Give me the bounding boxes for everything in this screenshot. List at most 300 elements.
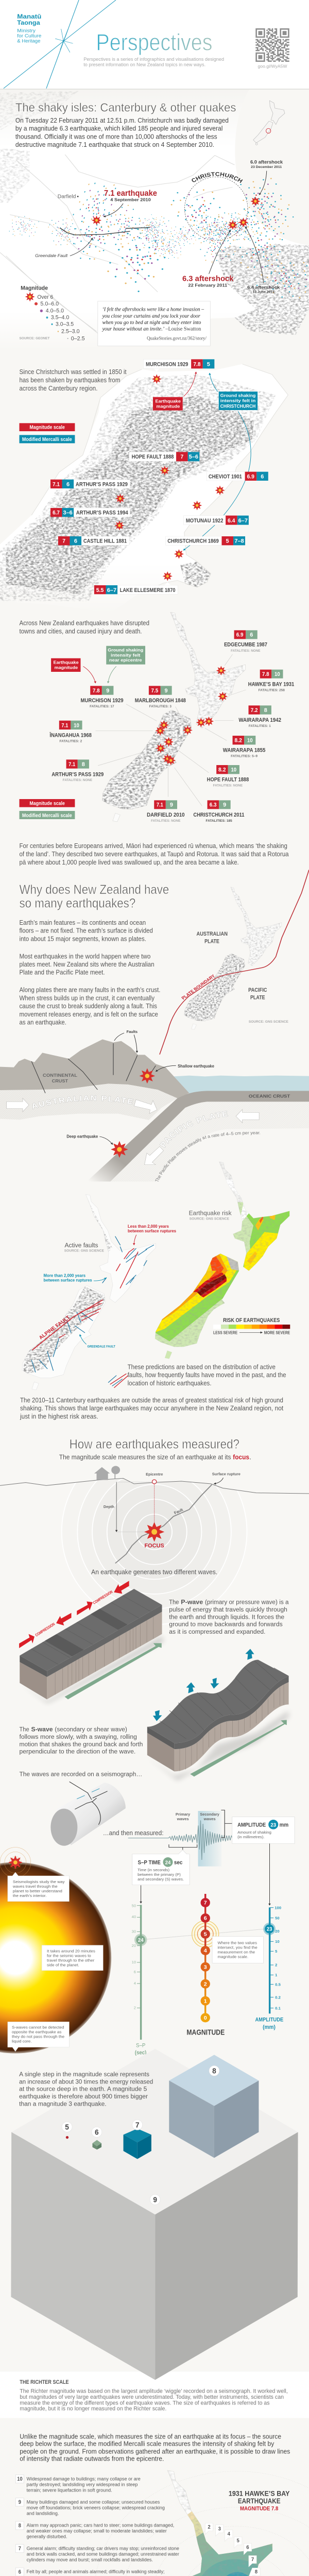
South Island relief map	[0, 364, 288, 613]
dotted intensity rings	[95, 2471, 309, 2576]
quake: Edgecumbe 1987: FATALITIES: NONE	[231, 649, 261, 653]
label: Hope Fault 1888: 7	[181, 453, 183, 460]
chart: amplitude scale: 20	[275, 1929, 280, 1934]
label: Hope Fault 1888: HOPE FAULT 1888	[132, 453, 174, 460]
label: Castle Hill 1881	[58, 533, 129, 545]
quake: Marlborough 1848: MARLBOROUGH 1848	[135, 698, 186, 704]
label: fault: Fault	[173, 1507, 184, 1515]
label: Lake Ellesmere 1870	[94, 582, 178, 594]
heading: how are earthquakes measured: How are earthquakes measured?	[70, 1436, 239, 1451]
header QR code: goo.gl/WyA5W	[258, 64, 287, 69]
intensity tags on map: 4	[228, 2531, 230, 2537]
map: plate boundary	[160, 870, 309, 1055]
intensity 7: and brick walls cracked, and some buildings damaged; unrestrained water	[27, 2552, 179, 2557]
intensity 8: 8	[19, 2523, 21, 2529]
text: across New Zealand: Across New Zealand earthquakes have disrupted	[19, 619, 149, 627]
chart: amplitude scale: 0.1	[275, 2006, 281, 2010]
rivers	[0, 155, 234, 333]
text: waves recorded: The waves are recorded on a seismograph…	[19, 1770, 142, 1777]
arrows to scales	[141, 1843, 269, 1905]
legend: magnitude: 2.5–3.0	[61, 329, 80, 334]
legend: magnitude	[20, 285, 85, 342]
chart: seismogram	[128, 1810, 233, 1867]
callout: S-waves: opposite the earthquake as	[12, 2030, 61, 2035]
chart: amplitude scale: 23	[267, 1926, 272, 1932]
text: S-wave: motion that shakes the ground back and forth	[19, 1740, 143, 1748]
quake: Christchurch 2011: 6.3	[210, 802, 217, 808]
intensity 9: and landsliding.	[27, 2511, 59, 2516]
Greendale Fault line and label: Greendale Fault	[35, 253, 68, 258]
callout: earthquake magnitude: Earthquake	[156, 399, 181, 404]
text: since Christchurch was settled: across the Canterbury region.	[19, 385, 97, 393]
callout: earthquake magnitude	[51, 658, 96, 683]
quake: Wairarapa 1942: WAIRARAPA 1942	[238, 718, 281, 723]
chart: magnitude scale: 5	[204, 1931, 207, 1937]
callout: seismologists: Seismologists study the way	[13, 1879, 65, 1884]
chart: amplitude scale: 0.5	[275, 1982, 281, 1987]
intensity 9	[15, 2498, 165, 2516]
label: Motunau 1922	[184, 512, 249, 525]
intensity 8: generally disturbed.	[27, 2534, 67, 2539]
label: faults	[114, 1029, 138, 1053]
label: epicentre	[146, 1472, 163, 1525]
arrow: P-wave direction	[65, 1643, 162, 1699]
oceanic crust	[87, 1091, 309, 1181]
legend: risk of earthquakes: RISK OF EARTHQUAKES	[223, 1318, 280, 1324]
chart: S-P scale: 40	[132, 1914, 136, 1919]
label: Murchison 1929: MURCHISON 1929	[146, 361, 188, 367]
blue leader to Christchurch	[183, 525, 215, 550]
cube: magnitude 6	[92, 2140, 101, 2149]
label: depth	[104, 1482, 152, 1532]
chart: amplitude scale: 0.2	[275, 1995, 281, 1999]
section: Richter band	[0, 2371, 309, 2418]
callout: intersection: magnitude scale.	[217, 1955, 248, 1959]
ground surface	[0, 1478, 309, 1494]
chart: magnitude scale: 0	[204, 2015, 207, 2021]
intensity 10: Widespread damage to buildings; many collapse or are	[27, 2477, 141, 2482]
label: Castle Hill 1881: CASTLE HILL 1881	[83, 537, 127, 544]
callout: ground shaking near epicentre	[106, 646, 145, 683]
label: 6.0 aftershock: 23 December 2011	[251, 165, 282, 169]
quake: Christchurch 2011: FATALITIES: 185	[205, 819, 232, 823]
label: earthquake risk	[189, 1209, 232, 1221]
label: Arthur's Pass 1929: ARTHUR’S PASS 1929	[76, 481, 128, 487]
logo: Manatū Taonga: Taonga	[17, 19, 40, 26]
chart: amplitude scale: 2	[275, 1963, 278, 1968]
chart: amplitude scale: AMPLITUDE	[255, 2017, 284, 2023]
label: Christchurch 1869: 7–8	[234, 537, 244, 544]
intensity 10	[15, 2475, 141, 2493]
callout: quote from Louise Swatton: your house without an invite.’	[102, 326, 165, 332]
label: 6.0 aftershock	[250, 160, 283, 195]
callout: S-P time: and secondary (S) waves.	[138, 1877, 184, 1882]
callout: ground shaking in Christchurch	[219, 392, 258, 410]
label: Lake Ellesmere 1870: LAKE ELLESMERE 1870	[120, 587, 176, 594]
legend: magnitude: 0–2.5	[71, 336, 85, 342]
callout: 20 minutes: for the seismic waves to	[47, 1954, 91, 1958]
quake: Hope Fault 1888: 10	[231, 767, 236, 773]
callout: S-P time	[132, 1850, 190, 1885]
quake: Murchison 1929: 7.8	[93, 688, 100, 694]
quake: Inangahua 1968: 10	[74, 723, 79, 728]
label: less than 2,000 years: between surface ruptures	[128, 1229, 176, 1233]
label: Cheviot 1901	[207, 472, 268, 484]
map: plate boundary: PACIFIC	[248, 988, 267, 993]
text: Richter explanation	[20, 2388, 288, 2412]
intro text	[15, 117, 229, 149]
quake: Murchison 1929: FATALITIES: 17	[90, 704, 114, 708]
quake: Arthur's Pass 1929: 7.1	[68, 762, 76, 768]
text: single step: A single step in the magnitude scale represents	[19, 2071, 149, 2078]
chart: S-P scale: 24	[138, 1938, 144, 1943]
callout: S-waves: S-waves cannot be detected	[12, 2025, 64, 2030]
label: oceanic crust: OCEANIC CRUST	[249, 1094, 290, 1099]
label: Hope Fault 1888: 5–6	[189, 453, 198, 460]
text: plates explanation: Earth’s main features – its continents and ocean	[19, 919, 146, 926]
Christchurch dashed circle and curved label: CHRISTCHURCH	[192, 172, 243, 183]
label: Hope Fault 1888	[129, 452, 199, 465]
label: continental crust: CONTINENTAL	[43, 1073, 77, 1078]
callout: seismologists: the earth’s interior.	[13, 1893, 46, 1898]
intensity 9: move off foundations; brick veneers collapse; widespread cracking	[27, 2505, 165, 2511]
quake: Wairarapa 1942	[238, 705, 281, 728]
section: NZ map labels and plate tectonics text	[20, 799, 309, 1055]
legend: scales	[20, 423, 75, 443]
label: 7.1 earthquake: 4 September 2010	[110, 197, 151, 202]
text: P-wave: (primary or pressure wave) is a	[205, 1598, 289, 1605]
quake: Edgecumbe 1987	[224, 630, 267, 653]
cube: magnitude 7	[124, 2129, 151, 2159]
label: Arthur's Pass 1994: 6.7	[53, 509, 60, 516]
label: deep earthquake	[66, 1134, 128, 1158]
section: seismograph and measuring	[0, 1782, 295, 2056]
diagram: plate cross-section	[0, 1029, 309, 1182]
quake: Edgecumbe 1987: 6	[250, 632, 253, 638]
icon: starburst lines	[4, 0, 116, 89]
subheading: magnitude scale: The magnitude scale measures the size of an earthquake at its	[59, 1454, 231, 1461]
quake: Inangahua 1968	[49, 721, 92, 743]
quake: Edgecumbe 1987: EDGECUMBE 1987	[224, 642, 267, 648]
text: plates explanation: floors – are not fixed. The earth’s surface is divided	[19, 927, 153, 934]
chart: seismogram: Secondary	[200, 1812, 219, 1817]
quake: Marlborough 1848: FATALITIES: 3	[149, 704, 171, 708]
chart: amplitude scale	[255, 1906, 284, 2030]
quake: Christchurch 2011	[193, 800, 245, 823]
text: plate movement rate: The Pacific Plate moves steadily at a rate of 4–5 cm per year.	[155, 1131, 261, 1182]
legend: magnitude: 3.0–3.5	[56, 321, 74, 327]
chart: S-P scale: 2	[134, 2006, 136, 2010]
quake: Hawke's Bay 1931: 10	[274, 672, 280, 677]
label: 6.4 aftershock	[247, 285, 280, 294]
text: P-wave: The	[169, 1598, 179, 1605]
heading: 1931 Hawke's Bay earthquake: MAGNITUDE 7.8	[240, 2506, 279, 2512]
label: more than 2,000 years	[44, 1273, 107, 1282]
label: Castle Hill 1881: 6	[74, 537, 77, 544]
Darfield label: Darfield	[58, 194, 76, 199]
header description	[83, 57, 224, 67]
label: 6.3 aftershock: 22 February 2011	[188, 283, 227, 288]
chart: S-P scale	[132, 1904, 147, 2056]
chart: S-P scale: 50	[132, 1904, 136, 1908]
label: depth: Depth	[104, 1504, 114, 1509]
text: predictions: location of historic earthquakes.	[128, 1380, 212, 1387]
text: S-wave: perpendicular to the direction of the wave.	[19, 1748, 135, 1755]
callout: ground shaking in Christchurch: intensity felt in	[220, 398, 255, 403]
callout: intersection: intersect, you find the	[217, 1945, 258, 1950]
quake: Wairarapa 1942: FATALITIES: 1	[249, 724, 271, 728]
chart: seismogram: waves	[177, 1817, 189, 1821]
chart: magnitude scale: MAGNITUDE	[186, 2028, 225, 2037]
epicentre stars and arrows	[92, 196, 264, 283]
header band	[0, 0, 309, 90]
label and arrows: Pacific Plate: PACIFIC PLATE	[160, 1111, 228, 1148]
label and arrows: Australian Plate: AUSTRALIAN PLATE	[32, 1095, 133, 1109]
quake: Arthur's Pass 1929: FATALITIES: NONE	[63, 778, 92, 782]
intensity tags on map: 3	[218, 2526, 221, 2532]
arrows to key	[184, 372, 251, 515]
quake: Inangahua 1968: FATALITIES: 2	[60, 739, 82, 743]
intensity 10: terrain; severe liquefaction in soft ground.	[27, 2488, 112, 2493]
text: plates explanation: plates meet. New Zealand sits where the Australian	[19, 961, 154, 968]
intersect line	[147, 1929, 264, 1939]
callout: quote from Louise Swatton: QuakeStories.govt.nz/362/story/	[147, 336, 207, 341]
callout: amplitude: AMPLITUDE	[237, 1821, 266, 1828]
callout: amplitude: (in millimetres).	[237, 1835, 265, 1839]
quake: Edgecumbe 1987: 6.9	[236, 632, 244, 638]
text: Canterbury outside risk areas	[20, 1397, 283, 1420]
label: Murchison 1929	[143, 359, 214, 372]
text: P-wave: P-wave	[181, 1598, 203, 1605]
label: 6.4 aftershock: 13 June 2011	[253, 291, 274, 294]
callout: 20 minutes: travel through to the other	[47, 1958, 95, 1962]
callout: earthquake magnitude: magnitude	[156, 404, 180, 409]
callout: ground shaking near epicentre: Ground shaking	[108, 648, 143, 652]
chart: S-P scale: (sec)	[135, 2050, 146, 2056]
chart: S-P scale: 10	[132, 1960, 136, 1964]
callout: quote from Louise Swatton: ‘I felt the aftershocks were like a home invasion –	[102, 307, 204, 312]
label: Motunau 1922: 6.4	[228, 517, 235, 524]
text: predictions: These predictions are based on the distribution of active	[128, 1363, 276, 1370]
text: P-wave: pulse of energy that travels quickly through	[169, 1606, 287, 1613]
section: Richter scale and Mercalli	[15, 2379, 309, 2576]
label: Christchurch 1869: CHRISTCHURCH 1869	[167, 537, 219, 544]
intro text: destructive magnitude 7.1 earthquake that struck on 4 September 2010.	[15, 141, 214, 149]
label: Arthur's Pass 1994: ARTHUR’S PASS 1994	[76, 509, 128, 516]
focus star	[144, 1522, 164, 1549]
inset NZ locator map	[253, 100, 285, 145]
text: P-wave: as it is compressed and expanded.	[169, 1628, 265, 1635]
intensity 6: 6	[19, 2569, 21, 2575]
text: S-wave: (secondary or shear wave)	[55, 1726, 127, 1733]
dot: magnitude 5	[66, 2136, 68, 2139]
quake: Marlborough 1848: 9	[165, 688, 168, 694]
label: more than 2,000 years: More than 2,000 years	[44, 1273, 85, 1278]
chart: amplitude scale: 1	[275, 1973, 278, 1977]
diagram: S-wave block	[147, 1660, 289, 1781]
label: Arthur's Pass 1929: 6	[66, 481, 70, 487]
label: surface rupture	[212, 1472, 241, 1484]
text: plates explanation: movement releases energy, and is felt on the surface	[19, 1011, 158, 1018]
text: Richter explanation: measure the energy of the different types of earthquake waves. The size of earthquakes is referred to as	[20, 2400, 270, 2406]
label: continental crust	[43, 1073, 77, 1083]
label: earthquake risk: SOURCE: GNS SCIENCE	[190, 1217, 230, 1221]
quake: Hope Fault 1888: HOPE FAULT 1888	[207, 777, 249, 783]
legend: scales: Magnitude scale	[29, 425, 65, 430]
label: Christchurch 1869: 5	[226, 537, 229, 544]
text: since Christchurch was settled: Since Christchurch was settled in 1850 it	[19, 368, 127, 376]
intro text: thousand. Officially it was one of more than 10,000 aftershocks of the less	[15, 133, 217, 141]
Pacific plate	[110, 1101, 309, 1181]
legend: scales	[20, 799, 75, 819]
text: P-wave: ground to move backwards and forwards	[169, 1621, 283, 1628]
text: single step: than a magnitude 3 earthquake.	[19, 2100, 107, 2107]
text: single step: at the source deep in the earth. A magnitude 5	[19, 2086, 147, 2092]
heading: the shaky isles: The shaky isles: Canterbury & other quakes	[15, 101, 236, 114]
band: white background	[0, 2371, 309, 2418]
text: since Christchurch was settled: has been shaken by earthquakes from	[19, 377, 120, 384]
callout: ground shaking in Christchurch: Ground shaking	[220, 393, 255, 398]
Christchurch dashed circle and curved label	[184, 172, 248, 241]
chart: magnitude scale: 7	[204, 1900, 207, 1906]
text: predictions	[128, 1363, 286, 1387]
label: faults: Faults	[127, 1029, 138, 1034]
text: single step: earthquake is therefore about 900 times bigger	[19, 2093, 148, 2100]
callout: intersection: Where the two values	[217, 1941, 257, 1945]
callout: S-P time: Time (in seconds)	[138, 1868, 169, 1872]
quake: Christchurch 2011: 9	[223, 802, 226, 808]
pins: magnitude numbers: 5	[65, 2123, 69, 2131]
legend: risk of earthquakes	[213, 1318, 290, 1335]
heading: 1931 Hawke's Bay earthquake: EARTHQUAKE	[238, 2497, 281, 2505]
label: 7.1 earthquake	[104, 189, 157, 217]
legend: scales: Magnitude scale	[29, 801, 65, 806]
continental crust	[0, 1039, 189, 1098]
text: plates explanation: cause the crust to break suddenly along a fault. This	[19, 1003, 157, 1010]
arrows: compression: COMPRESSION	[34, 1622, 56, 1637]
callout: 20 minutes: It takes around 20 minutes	[47, 1949, 95, 1953]
quake: Hawke's Bay 1931: FATALITIES: 258	[259, 688, 285, 692]
intro text: by a magnitude 6.3 earthquake, which killed 185 people and injured several	[15, 125, 222, 132]
label: Motunau 1922: 6–7	[238, 517, 248, 524]
text: single step	[19, 2071, 153, 2107]
callout: quote from Louise Swatton	[98, 301, 210, 346]
terrain hills	[0, 91, 309, 335]
logo: Manatū Taonga: for Culture	[17, 33, 42, 39]
chart: magnitude scale	[186, 1894, 225, 2037]
legend: risk of earthquakes: MORE SEVERE	[264, 1330, 290, 1335]
label: Murchison 1929: 5	[207, 361, 210, 367]
map: New Zealand historic quakes	[102, 612, 245, 822]
intensity 7	[15, 2545, 179, 2563]
text: plates explanation: as an earthquake.	[19, 1019, 66, 1026]
pins: magnitude numbers: 8	[212, 2067, 216, 2075]
callout: intersection: measurement on the	[217, 1950, 255, 1955]
intro text: On Tuesday 22 February 2011 at 12.51 p.m. Christchurch was badly damaged	[15, 117, 229, 125]
chart: magnitude scale: 6	[204, 1916, 207, 1921]
subheading: magnitude scale: .	[249, 1454, 251, 1461]
chart: S-P scale: 20	[132, 1943, 136, 1948]
label: shallow earthquake: Shallow earthquake	[178, 1064, 214, 1069]
intensity tags on map: 5	[237, 2538, 239, 2544]
cube: magnitude 8	[169, 2055, 259, 2158]
callout: intersection	[212, 1937, 264, 1963]
section: fault labels, risk legend, how measured	[0, 1315, 309, 1624]
label: Cheviot 1901: 6	[261, 473, 264, 480]
chart: magnitude scale: 3	[204, 1964, 207, 1970]
intensity 6	[15, 2568, 165, 2576]
label: Lake Ellesmere 1870: 6–7	[107, 587, 116, 594]
quake: Wairarapa 1855: 10	[247, 738, 253, 743]
historic epicentre stars	[115, 374, 225, 510]
arrow: S-wave direction	[190, 1720, 287, 1776]
label: Cheviot 1901: 6.9	[247, 473, 254, 480]
quake: Inangahua 1968: ĪNANGAHUA 1968	[49, 733, 92, 738]
callout: S-P time: between the primary (P)	[138, 1872, 181, 1877]
label: surface rupture: Surface rupture	[212, 1472, 241, 1476]
arrows: compression	[19, 1581, 129, 1648]
intensity 7: 7	[19, 2546, 21, 2552]
icon: seismograph drum	[50, 1782, 126, 1846]
quake: Darfield 2010: 7.1	[157, 802, 163, 808]
legend: magnitude: 4.0–5.0	[46, 308, 64, 314]
text: across New Zealand	[20, 619, 149, 635]
label: 6.4 aftershock: 6.4 aftershock	[247, 285, 280, 290]
quake: Murchison 1929: MURCHISON 1929	[81, 698, 124, 704]
quake: Darfield 2010: DARFIELD 2010	[147, 812, 185, 818]
quake: Arthur's Pass 1929: ARTHUR’S PASS 1929	[52, 772, 104, 777]
legend: scales: Modified Mercalli scale	[22, 437, 72, 443]
quake: Hope Fault 1888	[207, 765, 249, 788]
callout: quote from Louise Swatton: –Louise Swatton	[165, 326, 201, 332]
chart: S-P scale: 30	[132, 1929, 136, 1934]
label: Lake Ellesmere 1870: 5.5	[96, 587, 104, 594]
intensity tags on map: 6	[246, 2545, 249, 2550]
intensity 8: and weaker ones may collapse; small to moderate landslides; water	[27, 2529, 167, 2534]
legend: magnitude: 5.0–6.0	[40, 301, 59, 307]
chart: seismogram: waves	[203, 1817, 216, 1821]
quake: Hawke's Bay 1931: HAWKE’S BAY 1931	[248, 682, 295, 687]
label: 6.0 aftershock: 6.0 aftershock	[250, 160, 283, 165]
text: Canterbury outside risk areas: just in the highest risk areas.	[20, 1413, 98, 1420]
text: Maori and ru whenua: pā where about 1,000 people lived was swallowed up, and the area became a lake.	[19, 859, 239, 866]
seismic rings	[61, 1479, 247, 1625]
chart: seismogram: Primary	[176, 1812, 191, 1817]
text: Maori and ru whenua	[20, 842, 289, 866]
text: plates explanation: When stress builds up in the crust, it can eventually	[19, 994, 154, 1002]
pins: magnitude numbers: 7	[135, 2121, 140, 2129]
label: Motunau 1922: MOTUNAU 1922	[186, 517, 224, 524]
label: 7.1 earthquake: 7.1 earthquake	[104, 189, 157, 198]
title: Perspectives: Perspectives	[96, 30, 212, 56]
logo: Manatū Taonga: Ministry	[17, 28, 36, 33]
callout: S-P time: 24	[165, 1860, 170, 1866]
map: plate boundary: PLATE BOUNDARY	[180, 974, 216, 1001]
intensity 9: 9	[19, 2500, 21, 2505]
earthquake scatter dots	[9, 174, 309, 302]
quake: Murchison 1929: 9	[106, 688, 109, 694]
intensity 10: 10	[17, 2477, 23, 2482]
pins: magnitude numbers	[62, 2065, 219, 2205]
text: Richter explanation: magnitude, but it is no longer measured on the Richter scale.	[20, 2406, 166, 2412]
label: more than 2,000 years: between surface ruptures	[44, 1278, 92, 1282]
quake: Wairarapa 1942: 8	[264, 708, 267, 714]
map: plate boundary: PLATE	[250, 995, 265, 1001]
intensity 9: Many buildings damaged and some collapse; unsecured houses	[27, 2500, 160, 2505]
quake: Hawke's Bay 1931	[248, 670, 295, 692]
label: active faults	[64, 1242, 105, 1252]
label: Arthur's Pass 1994	[50, 508, 130, 520]
